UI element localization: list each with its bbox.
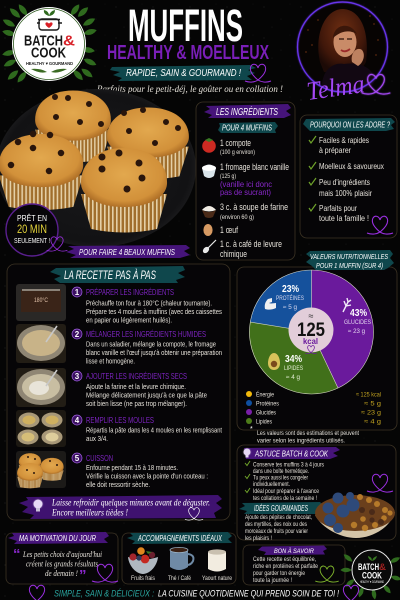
step 4 <box>72 415 222 443</box>
photo: muffins on a plate <box>0 89 196 247</box>
ingredient: farine <box>220 202 288 221</box>
footer tagline <box>24 585 364 600</box>
label: glucides <box>344 307 371 335</box>
badge: prêt en 20 min: 20 MIN <box>17 224 47 236</box>
checklist: toute la famille ! <box>319 213 369 223</box>
step 4: REMPLIR LES MOULES <box>86 415 154 425</box>
step 5: CUISSON <box>86 453 113 463</box>
panel: la recette pas à pas <box>7 264 230 520</box>
panel: astuce batch & cook <box>237 445 396 542</box>
sub-heading: pour 4 muffins <box>218 122 278 133</box>
icon: thé café <box>170 547 193 570</box>
step 1: 1 <box>75 288 80 297</box>
icon: blé <box>343 298 351 312</box>
badge: prêt en 20 min <box>6 204 67 256</box>
banner: pour faire 4 beaux muffins: POUR FAIRE 4 BEAUX MUFFINS <box>79 248 176 257</box>
step 5: Vérifie la cuisson avec la pointe d'un couteau : <box>86 472 208 480</box>
center: 125 kcal: 125 <box>297 320 325 341</box>
heading: valeurs nutritionnelles: POUR 1 MUFFIN (SUR 4) <box>316 261 383 270</box>
center: 125 kcal <box>288 308 334 354</box>
text: bon à savoir <box>253 557 319 584</box>
heading: bon à savoir: BON À SAVOIR <box>274 546 314 555</box>
step 1: en papier ou légèrement huilés). <box>86 316 172 324</box>
ingredient: fromage blanc: pas de sucrant) <box>220 187 271 197</box>
checklist: mais 100% plaisir <box>319 188 372 198</box>
text: bon à savoir: riche en protéines et parfaite <box>253 564 319 570</box>
ingredient: compote: 1 compote <box>220 138 251 148</box>
legend: ≈ 125 kcal <box>356 392 381 398</box>
tips list: tes collations de la semaine ! <box>253 496 317 502</box>
logo: Batch & Cook: COOK <box>31 46 66 62</box>
logo: Batch & Cook <box>2 3 98 84</box>
heading: astuce: ASTUCE BATCH & COOK <box>254 450 328 458</box>
note: estimations: * <box>250 426 253 433</box>
ingredient: levure: chimique <box>220 249 247 259</box>
muffin left <box>0 134 83 210</box>
step 3: soit bien lisse (ne pas trop mélanger). <box>86 399 187 408</box>
image: ingrédients secs <box>16 368 66 407</box>
ingredient: œuf: 1 œuf <box>220 225 238 235</box>
quote <box>13 546 102 584</box>
quote: de demain ! <box>45 569 78 578</box>
label: protéines: PROTÉINES <box>276 295 304 302</box>
label: yaourt: Yaourt nature <box>202 575 232 582</box>
icon: biceps <box>265 298 276 310</box>
text: idées gourmandes: morceaux de fruits pour varier <box>245 528 308 535</box>
muffin top <box>35 90 111 162</box>
step 2 <box>72 329 222 366</box>
step 1: Prépare tes 4 moules à muffins (avec des caissettes <box>86 307 222 316</box>
logo: footer Batch & Cook: HEALTHY ♥ GOURMAND <box>360 580 384 584</box>
note: estimations: Les valeurs sont des estimations et peuvent <box>257 430 359 437</box>
portrait: Telma <box>298 2 390 106</box>
step 2: Dans un saladier, mélange la compote, le fromage <box>86 340 216 348</box>
legend: ≈ 5 g <box>364 400 381 408</box>
heading: idées gourmandes: IDÉES GOURMANDES <box>254 504 308 513</box>
step 5: elle doit ressortir sèche. <box>86 480 150 489</box>
panel: pourquoi on les adore <box>300 115 397 238</box>
ingredient: levure: 1 c. à café de levure <box>220 239 282 249</box>
step 3: 3 <box>75 372 80 381</box>
heading: les ingrédients <box>204 104 291 118</box>
legend: Énergie <box>256 390 274 398</box>
label: lipides: 34% <box>285 353 303 365</box>
ingredient: fromage blanc: (125 g) <box>220 173 236 180</box>
icon: avocat <box>268 353 280 370</box>
heading: astuce <box>244 447 340 459</box>
text: idées gourmandes: Ajoute des pépites de chocolat, <box>245 514 312 521</box>
checklist: Parfaits pour <box>319 203 357 213</box>
ingredient: fromage blanc <box>220 162 289 197</box>
icon: heart <box>367 216 393 234</box>
label: protéines: ≈ 5 g <box>283 304 298 311</box>
ingredient: levure <box>220 239 282 259</box>
legend: Lipides <box>256 418 272 426</box>
logo: footer Batch & Cook: BATCH <box>358 562 379 573</box>
label: lipides <box>284 353 303 381</box>
label: fruits frais: Fruits frais <box>131 575 155 582</box>
ingredient: compote <box>220 138 255 156</box>
checklist: Peu d'ingrédients <box>319 177 370 187</box>
logo: Batch & Cook: BATCH <box>24 34 63 50</box>
badge: prêt en 20 min: PRÊT EN <box>17 214 47 223</box>
icon: fromage blanc <box>202 164 216 178</box>
logo: footer Batch & Cook: & <box>379 562 386 573</box>
step 2: blanc vanille et l'œuf jusqu'à obtenir une préparation <box>86 348 222 357</box>
tips list <box>245 461 324 502</box>
text: bon à savoir: toute la journée ! <box>253 578 292 584</box>
image: moules <box>16 410 66 447</box>
panel: ingrédients <box>196 102 295 260</box>
subtitle: healthy et moelleux: HEALTHY & MOELLEUX <box>107 41 269 64</box>
text: bon à savoir: Cette recette est équilibrée, <box>253 557 316 563</box>
tips list: Idéal pour préparer à l'avance <box>253 489 320 495</box>
text: bon à savoir: pour garder ton énergie <box>253 571 306 577</box>
center: 125 kcal: ≈ <box>309 311 314 321</box>
panel: accompagnements idéaux <box>122 532 236 584</box>
step 3: Ajoute la farine et la levure chimique. <box>86 382 186 391</box>
footer tagline: LA CUISINE QUOTIDIENNE QUI PREND SOIN DE TOI ! <box>158 588 339 598</box>
step 2: lisse et homogène. <box>86 356 135 366</box>
muffin front <box>81 148 167 232</box>
ingredient: farine: 3 c. à soupe de farine <box>220 202 288 212</box>
quote: créent les grands résultats <box>26 560 98 568</box>
image: four: 180°C <box>34 297 48 304</box>
label: lipides: LIPIDES <box>284 366 303 372</box>
icon: fruits frais <box>128 547 158 574</box>
icon: ampoule <box>244 449 250 458</box>
icon: heart <box>92 564 118 582</box>
label: glucides: ≈ 23 g <box>348 328 366 335</box>
icon: green heart <box>315 566 339 582</box>
icon: cuillère <box>202 240 216 254</box>
image: four <box>16 284 66 321</box>
image: muffins cuits <box>16 451 66 488</box>
panel: bon à savoir <box>243 545 345 585</box>
heading: idées gourmandes <box>239 502 323 514</box>
slice: protéines <box>250 270 312 332</box>
heading: valeurs nutritionnelles <box>306 250 394 270</box>
step 1: Préchauffe ton four à 180°C (chaleur tournante). <box>86 298 212 308</box>
icon: farine <box>202 206 216 218</box>
label: glucides: GLUCIDES <box>344 320 371 326</box>
ingredient: fromage blanc: 1 fromage blanc vanille <box>220 162 289 172</box>
banner: rapide sain gourmand <box>110 64 271 82</box>
legend: Glucides <box>256 410 276 416</box>
logo: footer Batch & Cook: COOK <box>362 570 382 582</box>
step 2: 2 <box>75 330 80 339</box>
checklist: à préparer <box>319 145 351 155</box>
panel: valeurs nutritionnelles <box>237 250 397 430</box>
label: protéines: 23% <box>282 283 300 295</box>
step 4: aux 3/4. <box>86 434 108 443</box>
step 5: Enfourne pendant 15 à 18 minutes. <box>86 463 178 472</box>
step 1: PRÉPARER LES INGRÉDIENTS <box>86 287 174 297</box>
label: lipides: ≈ 4 g <box>286 374 301 381</box>
callout: laisse refroidir: Encore meilleurs tièdes ! <box>51 508 128 518</box>
checklist: Faciles & rapides <box>319 135 369 145</box>
step 5 <box>72 453 208 489</box>
banner: pour faire 4 beaux muffins <box>66 245 190 258</box>
sub-heading: pour 4 muffins: POUR 4 MUFFINS <box>222 124 273 132</box>
legend: ≈ 4 g <box>364 418 381 426</box>
legend: ≈ 23 g <box>361 410 381 416</box>
legend <box>246 390 381 426</box>
callout: laisse refroidir: Laisse refroidir quelques minutes avant de déguster. <box>51 498 210 508</box>
tips list: dans une boîte hermétique. <box>253 469 309 475</box>
label: glucides: 43% <box>350 307 368 319</box>
text: idées gourmandes <box>245 514 312 542</box>
logo: Batch & Cook: HEALTHY ♥ GOURMAND <box>26 61 74 66</box>
step 5: 5 <box>75 454 80 463</box>
step 1 <box>72 287 222 324</box>
label: thé café: Thé / Café <box>168 575 191 582</box>
ingredient: farine: (environ 60 g) <box>220 214 254 221</box>
heading: la recette: LA RECETTE PAS À PAS <box>64 267 156 282</box>
heading: motivation: MA MOTIVATION DU JOUR <box>19 534 96 543</box>
quote: ” <box>79 567 86 584</box>
step 4: Répartis la pâte dans les 4 moules en les remplissant <box>86 426 222 434</box>
pie chart: macronutrients <box>249 270 374 394</box>
heading: les ingrédients: LES INGRÉDIENTS <box>216 105 278 118</box>
step 3: Mélange délicatement jusqu'à ce que la pâte <box>86 390 207 400</box>
logo: Batch & Cook: & <box>63 34 76 50</box>
icon: yaourt <box>208 549 226 572</box>
checklist <box>309 135 385 223</box>
tagline: Parfaits pour le petit-déj, le goûter ou en collation ! <box>96 84 283 95</box>
slice: glucides <box>312 270 373 388</box>
note: estimations: varier selon les ingrédients utilisés. <box>257 438 345 444</box>
note: estimations <box>250 426 359 444</box>
legend: Protéines <box>256 400 279 408</box>
icon: œuf <box>203 224 213 236</box>
ingredient: fromage blanc: (vanille ici donc <box>220 179 272 189</box>
step 3 <box>72 371 207 408</box>
label: protéines <box>276 283 304 311</box>
step 3: AJOUTER LES INGRÉDIENTS SECS <box>86 371 187 381</box>
logo: footer Batch & Cook <box>340 550 400 600</box>
tips list: Tu peux aussi les congeler <box>253 476 308 482</box>
quote: Les petits choix d'aujourd'hui <box>22 550 102 559</box>
callout: laisse refroidir <box>19 495 222 520</box>
image: mélange humide <box>16 324 66 363</box>
icon: tomate <box>202 138 216 153</box>
title: MUFFINS <box>128 0 243 51</box>
portrait: Telma: Telma <box>305 69 366 106</box>
badge: prêt en 20 min: SEULEMENT ! <box>14 236 50 245</box>
step 4: 4 <box>75 416 80 425</box>
slice: lipides <box>249 322 338 394</box>
heading: la recette <box>50 266 185 283</box>
muffin right <box>107 108 189 179</box>
ingredient: compote: (100 g environ) <box>220 149 255 156</box>
text: idées gourmandes: des myrtilles, des noix ou des <box>245 521 307 528</box>
photo: bol myrtilles et noix <box>315 492 395 538</box>
step 2: MÉLANGER LES INGRÉDIENTS HUMIDES <box>86 329 206 339</box>
quote: “ <box>13 546 20 563</box>
icon: heart <box>367 474 393 492</box>
text: idées gourmandes: les plaisirs ! <box>245 535 272 542</box>
panel: ma motivation du jour <box>6 532 118 584</box>
center: 125 kcal: kcal <box>303 336 318 346</box>
tips list: Conserve tes muffins 3 à 4 jours <box>253 462 324 468</box>
footer tagline: SIMPLE, SAIN & DÉLICIEUX : <box>54 588 154 598</box>
heading: accompagnements: ACCOMPAGNEMENTS IDÉAUX <box>137 534 222 543</box>
banner: rapide sain gourmand: RAPIDE, SAIN & GOURMAND ! <box>126 67 241 79</box>
tips list: individuellement. <box>253 482 290 488</box>
